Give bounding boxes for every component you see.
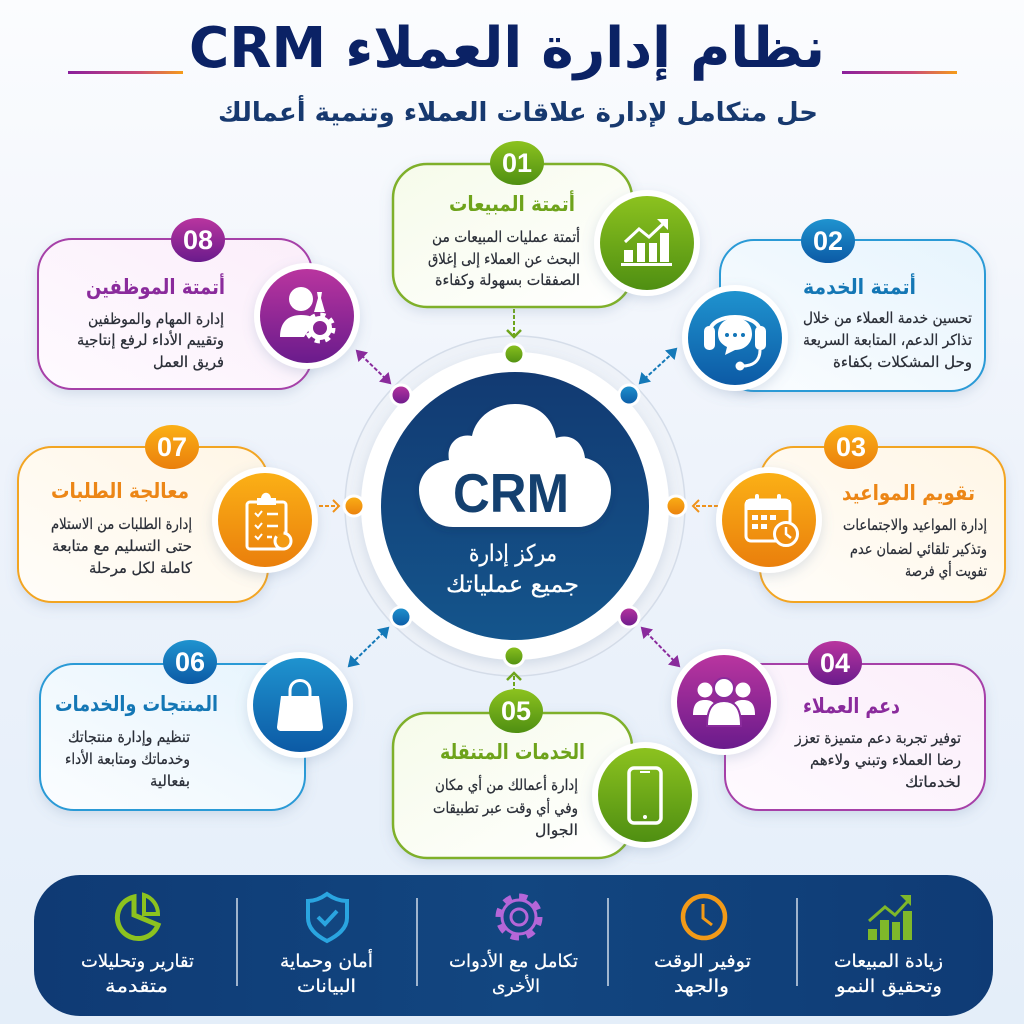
badge 07 (145, 425, 199, 469)
card title: تقويم المواعيد (842, 481, 975, 505)
panel: 02 service automation (682, 219, 985, 391)
benefit: time saving (654, 896, 751, 997)
hub caption: مركز إدارة (469, 541, 557, 567)
arrows (319, 309, 718, 692)
panel: 05 mobile services (393, 689, 698, 858)
card text: إدارة الطلبات من الاستلام (51, 515, 192, 533)
icon: shopping bag (247, 652, 353, 758)
card text: الجوال (535, 821, 578, 839)
card text: تذاكر الدعم، المتابعة السريعة (803, 331, 972, 349)
benefit: sales growth (834, 895, 943, 997)
icon: clipboard checklist (212, 467, 318, 573)
card text: وفي أي وقت عبر تطبيقات (433, 798, 578, 818)
badge 06: 06 (175, 647, 205, 677)
card text: إدارة المواعيد والاجتماعات (843, 516, 987, 534)
subtitle: حل متكامل لإدارة علاقات العملاء وتنمية أعمالك (218, 95, 818, 128)
icon: smartphone (592, 742, 698, 848)
panel: 06 products and services (40, 640, 353, 810)
panel: 03 appointments calendar (716, 425, 1005, 602)
badge 05 (489, 689, 543, 733)
icon: employee with gear (254, 263, 360, 369)
benefit: integration: الأخرى (492, 975, 540, 997)
title underline right (842, 71, 957, 74)
badge 05: 05 (501, 696, 531, 726)
card text (51, 515, 193, 577)
card text: فريق العمل (153, 353, 224, 371)
badge 08: 08 (183, 225, 213, 255)
card text (77, 310, 224, 371)
badge 03: 03 (836, 432, 866, 462)
icon: team (671, 649, 777, 755)
hub caption (446, 541, 579, 598)
card text (433, 775, 578, 839)
icon: gear (499, 897, 539, 937)
card text: وحل المشكلات بكفاءة (833, 353, 972, 371)
icon: clock (683, 896, 725, 938)
card text: لخدماتك (905, 773, 961, 791)
card title: الخدمات المتنقلة (440, 740, 585, 764)
card title: أتمتة المبيعات (449, 189, 575, 216)
panel: 07 order processing (18, 425, 318, 602)
badge 02: 02 (813, 226, 843, 256)
badge 01 (490, 141, 544, 185)
benefit: time saving: والجهد (674, 976, 729, 997)
benefit: time saving: توفير الوقت (654, 951, 751, 972)
badge 02 (801, 219, 855, 263)
benefit: integration: تكامل مع الأدوات (449, 950, 578, 972)
card text: حتى التسليم مع متابعة (52, 537, 192, 555)
benefit: security (280, 894, 373, 997)
card text (428, 227, 580, 289)
badge 04: 04 (820, 648, 850, 678)
icon: headset (682, 285, 788, 391)
card text (843, 516, 987, 581)
badge 01: 01 (502, 148, 532, 178)
connector dots (344, 344, 686, 666)
badge 06 (163, 640, 217, 684)
card title: معالجة الطلبات (51, 479, 189, 503)
benefit: security: أمان وحماية (280, 949, 373, 972)
central CRM hub (345, 336, 685, 676)
card title: أتمتة الخدمة (803, 272, 916, 299)
card text: بفعالية (150, 772, 190, 790)
panel: 04 customer support (671, 641, 985, 810)
benefit: reports (81, 895, 194, 997)
card text: توفير تجربة دعم متميزة تعزز (794, 729, 961, 747)
bottom benefits panel (34, 875, 993, 1016)
benefit: sales growth: وتحقيق النمو (835, 976, 942, 997)
cloud (419, 404, 611, 527)
icon: calendar clock (716, 467, 822, 573)
card title: أتمتة الموظفين (86, 272, 225, 299)
card title: دعم العملاء (803, 694, 900, 718)
badge 08 (171, 218, 225, 262)
card title: المنتجات والخدمات (55, 692, 218, 716)
benefit: reports: تقارير وتحليلات (81, 951, 194, 972)
card text: تنظيم وإدارة منتجاتك (68, 728, 190, 746)
card text: تفويت أي فرصة (905, 561, 987, 581)
CRM label: CRM (453, 462, 569, 524)
badge 03 (824, 425, 878, 469)
hub caption: جميع عملياتك (446, 572, 579, 598)
panel: 01 sales automation (393, 141, 700, 307)
card text (65, 728, 190, 790)
icon: growth bars (868, 895, 912, 940)
icon: shield (308, 894, 347, 941)
card text: تحسين خدمة العملاء من خلال (803, 309, 972, 327)
card text: إدارة أعمالك من أي مكان (435, 775, 578, 795)
card text: كاملة لكل مرحلة (89, 559, 193, 577)
icon: pie chart (117, 895, 158, 939)
card text: وتقييم الأداء لرفع إنتاجية (77, 330, 224, 349)
panel: 08 employee automation (38, 218, 360, 389)
card text: أتمتة عمليات المبيعات من (432, 227, 580, 246)
benefit: reports: متقدمة (105, 976, 168, 997)
badge 04 (808, 641, 862, 685)
card text (803, 309, 972, 371)
card text: الصفقات بسهولة وكفاءة (435, 271, 580, 289)
card text: رضا العملاء وتبني ولاءهم (810, 751, 961, 770)
card text (794, 729, 961, 791)
benefit: sales growth: زيادة المبيعات (834, 951, 943, 972)
title: نظام إدارة العملاء CRM (189, 16, 825, 81)
benefit: security: البيانات (297, 976, 356, 997)
icon: growth chart (594, 190, 700, 296)
benefit: integration (449, 897, 578, 997)
card text: إدارة المهام والموظفين (88, 310, 224, 328)
badge 07: 07 (157, 432, 187, 462)
dividers (237, 898, 797, 986)
title underline left (68, 71, 183, 74)
card text: البحث عن العملاء إلى إغلاق (428, 250, 580, 268)
card text: وتذكير تلقائي لضمان عدم (850, 540, 987, 559)
card text: وخدماتك ومتابعة الأداء (65, 749, 190, 768)
